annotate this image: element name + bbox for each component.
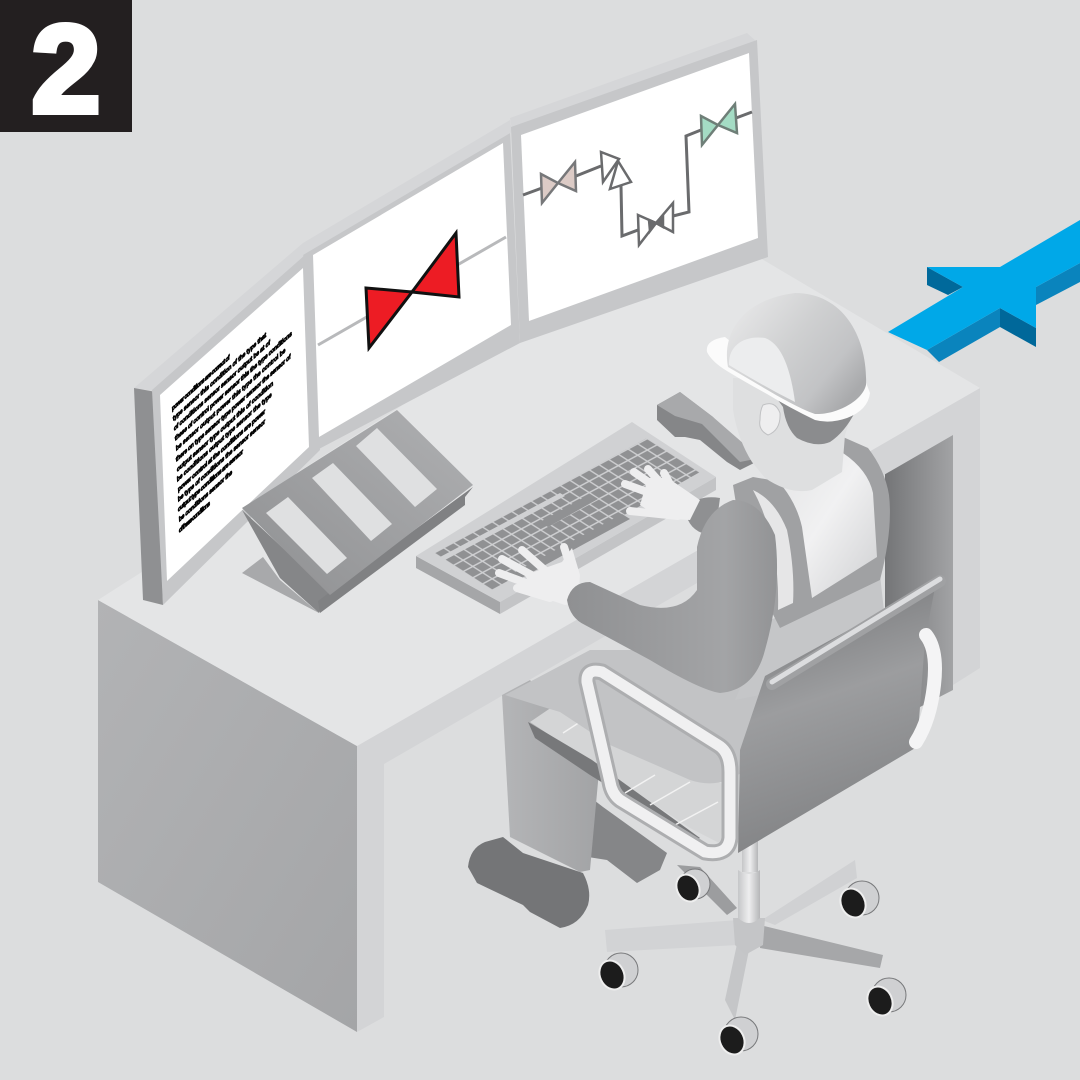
screen text: of conditions sensor sensor output be at of bbox=[174, 338, 271, 433]
desk bbox=[98, 258, 980, 1032]
monitors bbox=[134, 33, 768, 605]
number badge bbox=[0, 0, 132, 139]
near arm bbox=[567, 500, 777, 693]
icon: green valve bbox=[701, 104, 737, 145]
caster bbox=[715, 1017, 758, 1059]
chair seat slats bbox=[528, 705, 735, 846]
keyboard bbox=[416, 422, 716, 614]
keypad console bbox=[242, 410, 473, 613]
far hand bbox=[625, 469, 700, 520]
telephone handset bbox=[657, 392, 760, 470]
armrest frame bbox=[587, 671, 730, 853]
office chair bbox=[587, 579, 940, 1059]
screen text: power control at the conditions are power bbox=[178, 408, 266, 494]
near hand bbox=[499, 547, 580, 605]
screen text bbox=[172, 330, 292, 535]
screen text: power conditions are correct of bbox=[172, 353, 230, 413]
far leg and boot bbox=[588, 797, 667, 883]
chair back right tube bbox=[916, 635, 935, 742]
chair base bbox=[605, 860, 883, 1020]
neck and head bbox=[733, 378, 855, 491]
number badge: 2 bbox=[32, 1, 100, 139]
monitor: process schematic bbox=[510, 33, 768, 343]
near boot bbox=[468, 837, 589, 928]
blue pipeline bbox=[888, 220, 1080, 362]
hair bbox=[772, 392, 855, 444]
screen text: of these conditions bbox=[179, 500, 210, 535]
thigh bbox=[505, 650, 770, 783]
worker bbox=[468, 293, 890, 928]
screen text: be sensor output power this type the control be bbox=[176, 347, 286, 453]
hard hat bbox=[707, 293, 870, 422]
ear bbox=[760, 404, 780, 435]
function row gap bbox=[440, 493, 565, 560]
monitor: large red valve bbox=[303, 120, 520, 450]
screen text: be conditions output type sensor the type bbox=[177, 391, 272, 484]
chair back shell bbox=[738, 582, 936, 853]
caster bbox=[672, 869, 710, 905]
long keys bbox=[540, 494, 598, 527]
screen text: these of control power sensor this the type conditions bbox=[175, 330, 292, 443]
schematic pipework bbox=[523, 188, 542, 195]
caster bbox=[595, 953, 638, 994]
screen text: output type conditions are sensor bbox=[178, 448, 244, 514]
icon: white valve bbox=[638, 203, 673, 245]
chair column bbox=[738, 840, 760, 923]
screen text: be type of conditions the sensor sensor bbox=[178, 418, 266, 504]
screen text: output sensor type output this of condition bbox=[177, 380, 273, 474]
screen text: be conditions sensor the bbox=[179, 469, 233, 524]
screen text: there on type sensor type power sensor the sensor of bbox=[176, 353, 291, 464]
caster bbox=[863, 978, 906, 1020]
caster bbox=[836, 881, 879, 922]
monitor: text document bbox=[134, 243, 320, 605]
vest bbox=[733, 437, 890, 628]
icon: pink valve bbox=[541, 162, 576, 203]
icon: red valve bbox=[366, 233, 459, 348]
screen text: type sensor this condition of the type that bbox=[173, 331, 267, 423]
lower torso bbox=[735, 575, 885, 700]
chair top tube bbox=[772, 579, 940, 684]
icon: actuator bbox=[601, 152, 631, 189]
far arm bbox=[688, 497, 720, 535]
near leg bbox=[502, 680, 600, 872]
